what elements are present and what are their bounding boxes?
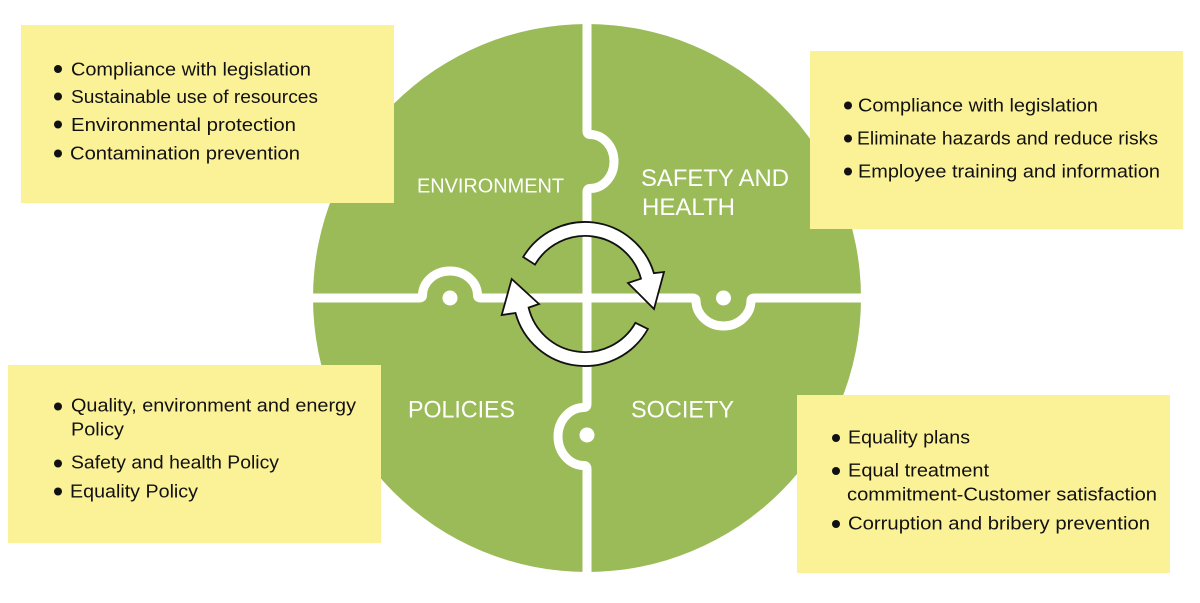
panel: policies notes: Safety and health Policy <box>71 452 280 472</box>
puzzle circle <box>309 20 865 576</box>
panel: policies notes: Quality, environment and energy <box>71 394 357 416</box>
panel: policies notes: Policy <box>71 418 125 440</box>
label: environment: ENVIRONMENT <box>417 176 564 198</box>
label: policies: POLICIES <box>408 396 515 424</box>
panel: society notes <box>797 395 1170 573</box>
arrow: top cycle arrow <box>523 222 664 309</box>
panel: safety and health notes: Compliance with legislation <box>858 94 1098 116</box>
panel: environment notes: Sustainable use of resources <box>71 86 318 107</box>
panel: policies notes <box>8 365 381 543</box>
label: society: SOCIETY <box>631 396 734 424</box>
panel: safety and health notes <box>810 51 1183 229</box>
panel: environment notes: Compliance with legislation <box>71 58 311 80</box>
panel: policies notes: Equality Policy <box>70 480 199 502</box>
panel: environment notes <box>21 25 394 203</box>
panel: environment notes: Contamination prevention <box>70 142 300 164</box>
panel: society notes: Equal treatment <box>848 460 989 480</box>
panel: society notes: Corruption and bribery prevention <box>848 512 1150 534</box>
panel: environment notes: Environmental protection <box>71 114 296 135</box>
panel: society notes: Equality plans <box>848 426 970 448</box>
label: safety and health <box>641 165 789 221</box>
panel: safety and health notes: Eliminate hazards and reduce risks <box>857 128 1158 148</box>
arrow: bottom cycle arrow <box>502 279 648 366</box>
panel: safety and health notes: Employee training and information <box>858 160 1160 182</box>
label: safety and health: HEALTH <box>642 194 735 221</box>
label: safety and health: SAFETY AND <box>641 165 789 192</box>
panel: society notes: commitment-Customer satisfaction <box>847 484 1157 504</box>
